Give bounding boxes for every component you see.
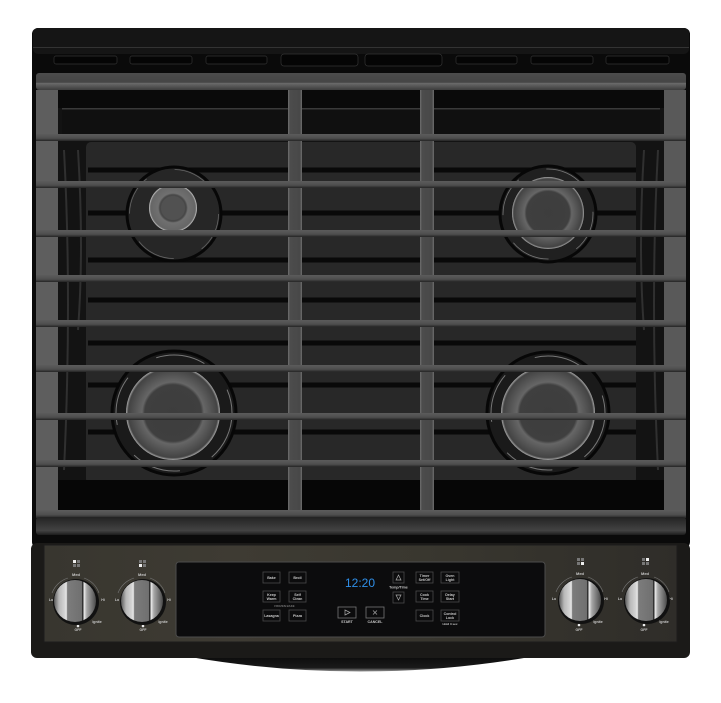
knob 3: Ignite [593, 620, 603, 624]
knob 1: Lo [49, 598, 53, 602]
burner: rear left [127, 167, 221, 261]
grate: vertical bars [288, 90, 434, 510]
button labels: START [341, 620, 354, 624]
button labels: Hold 3 sec [442, 622, 458, 626]
burner: rear right [500, 166, 596, 262]
button labels: Lock [446, 616, 454, 620]
cooktop pan [36, 74, 686, 534]
knob 4: Med [641, 571, 650, 576]
knob 1: Ignite [92, 620, 102, 624]
button labels: Warm [267, 597, 276, 601]
knob 1: Hi [101, 598, 105, 602]
display panel [176, 562, 545, 637]
button labels: Self [294, 593, 302, 597]
button labels: Clean [293, 597, 302, 601]
knob 2 [115, 560, 171, 632]
button labels: CANCEL [368, 620, 383, 624]
clock display: 12:20 [345, 576, 375, 590]
button labels: Oven [446, 574, 454, 578]
button labels [264, 574, 458, 626]
knob 2: Lo [115, 598, 119, 602]
button labels: Temp/Time [389, 586, 408, 590]
button labels: Start [446, 597, 455, 601]
button labels: Keep [267, 593, 277, 597]
knob 3 [552, 558, 608, 632]
knob 2: OFF [140, 628, 147, 632]
button labels: Timer [420, 574, 430, 578]
button labels: Cook [420, 593, 429, 597]
control buttons [263, 572, 459, 621]
button labels: Broil [293, 576, 302, 580]
grate: horizontal bars [36, 73, 686, 518]
button labels: Pizza [293, 614, 303, 618]
button labels: Light [446, 578, 455, 582]
button labels: FROZEN BAKE [274, 604, 295, 608]
knob 2: Hi [167, 598, 171, 602]
knob 4: Lo [618, 597, 622, 601]
control panel [31, 543, 690, 658]
button labels: Set/Off [419, 578, 431, 582]
knob 1: Med [72, 572, 81, 577]
knob 4: Hi [669, 597, 673, 601]
button labels: Lasagna [264, 614, 280, 618]
button labels: Time [420, 597, 429, 601]
knob 3: Hi [604, 597, 608, 601]
burner: front left [112, 351, 236, 475]
knob 4: Ignite [659, 620, 669, 624]
knob 4 [618, 558, 673, 632]
burner: front right [487, 352, 609, 474]
knob 1 [49, 560, 105, 632]
knob 2: Ignite [158, 620, 168, 624]
cooktop body [32, 28, 690, 548]
knob 2: Med [138, 572, 147, 577]
oven handle [190, 657, 530, 672]
knob 3: Lo [552, 597, 556, 601]
button labels: Clock [420, 614, 429, 618]
button icons [345, 575, 401, 615]
front lip [36, 517, 686, 535]
button labels: Bake [267, 576, 276, 580]
button labels: Control [444, 612, 456, 616]
knob 3: Med [576, 571, 585, 576]
knob 1: OFF [74, 628, 82, 632]
button labels: Delay [445, 593, 455, 597]
knob 4: OFF [640, 628, 648, 632]
knob 3: OFF [576, 628, 583, 632]
rear vents [54, 54, 669, 66]
